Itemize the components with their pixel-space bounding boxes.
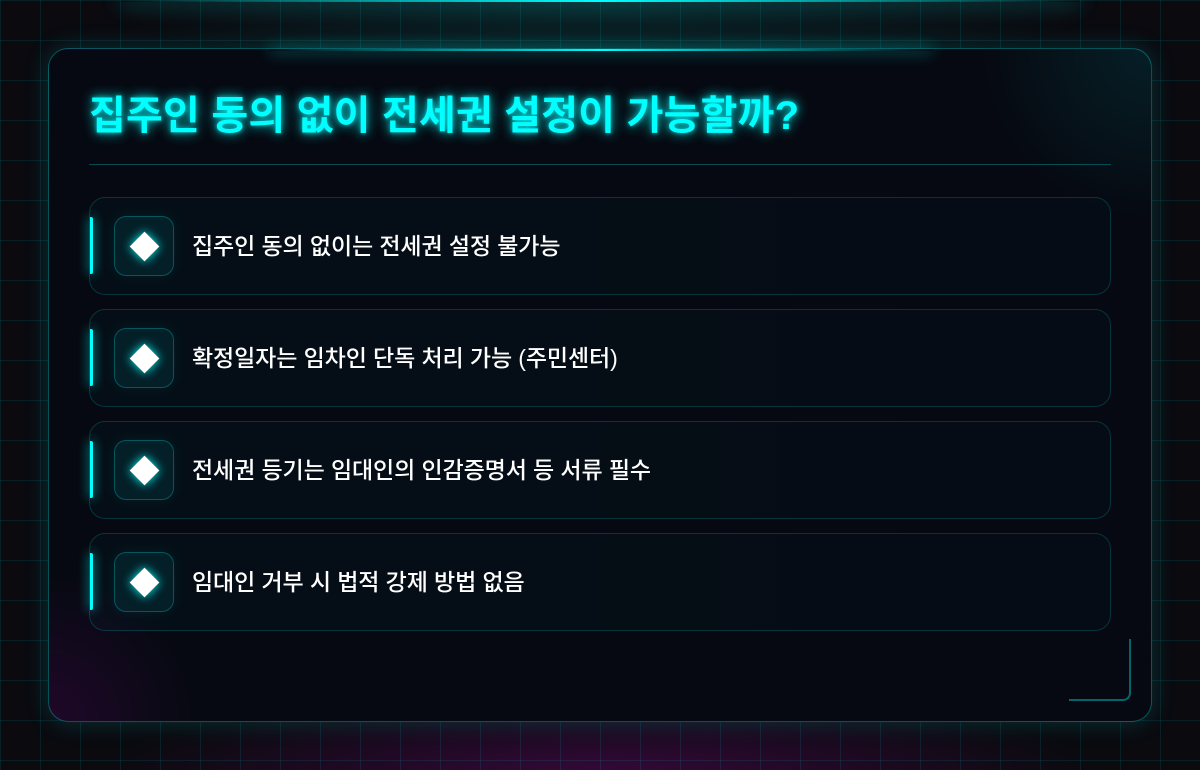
item text 3: 전세권 등기는 임대인의 인감증명서 등 서류 필수: [192, 457, 651, 483]
icon: diamond 3: [114, 440, 174, 500]
list item 1: [89, 197, 1111, 295]
item text 1: 집주인 동의 없이는 전세권 설정 불가능: [192, 233, 560, 259]
accent bar 4: [90, 553, 93, 610]
top glow bar: [120, 0, 1080, 2]
card top glow bar: [269, 49, 933, 51]
list item 2: [89, 309, 1111, 407]
title: 집주인 동의 없이 전세권 설정이 가능할까?: [89, 94, 799, 138]
accent bar 1: [90, 217, 93, 274]
icon: diamond 1: [114, 216, 174, 276]
accent bar 2: [90, 329, 93, 386]
item text 4: 임대인 거부 시 법적 강제 방법 없음: [192, 569, 525, 595]
item text 2: 확정일자는 임차인 단독 처리 가능 (주민센터): [192, 345, 618, 371]
list item 3: [89, 421, 1111, 519]
list item 4: [89, 533, 1111, 631]
accent bar 3: [90, 441, 93, 498]
icon: diamond 4: [114, 552, 174, 612]
icon: diamond 2: [114, 328, 174, 388]
corner bracket: [1069, 639, 1131, 701]
